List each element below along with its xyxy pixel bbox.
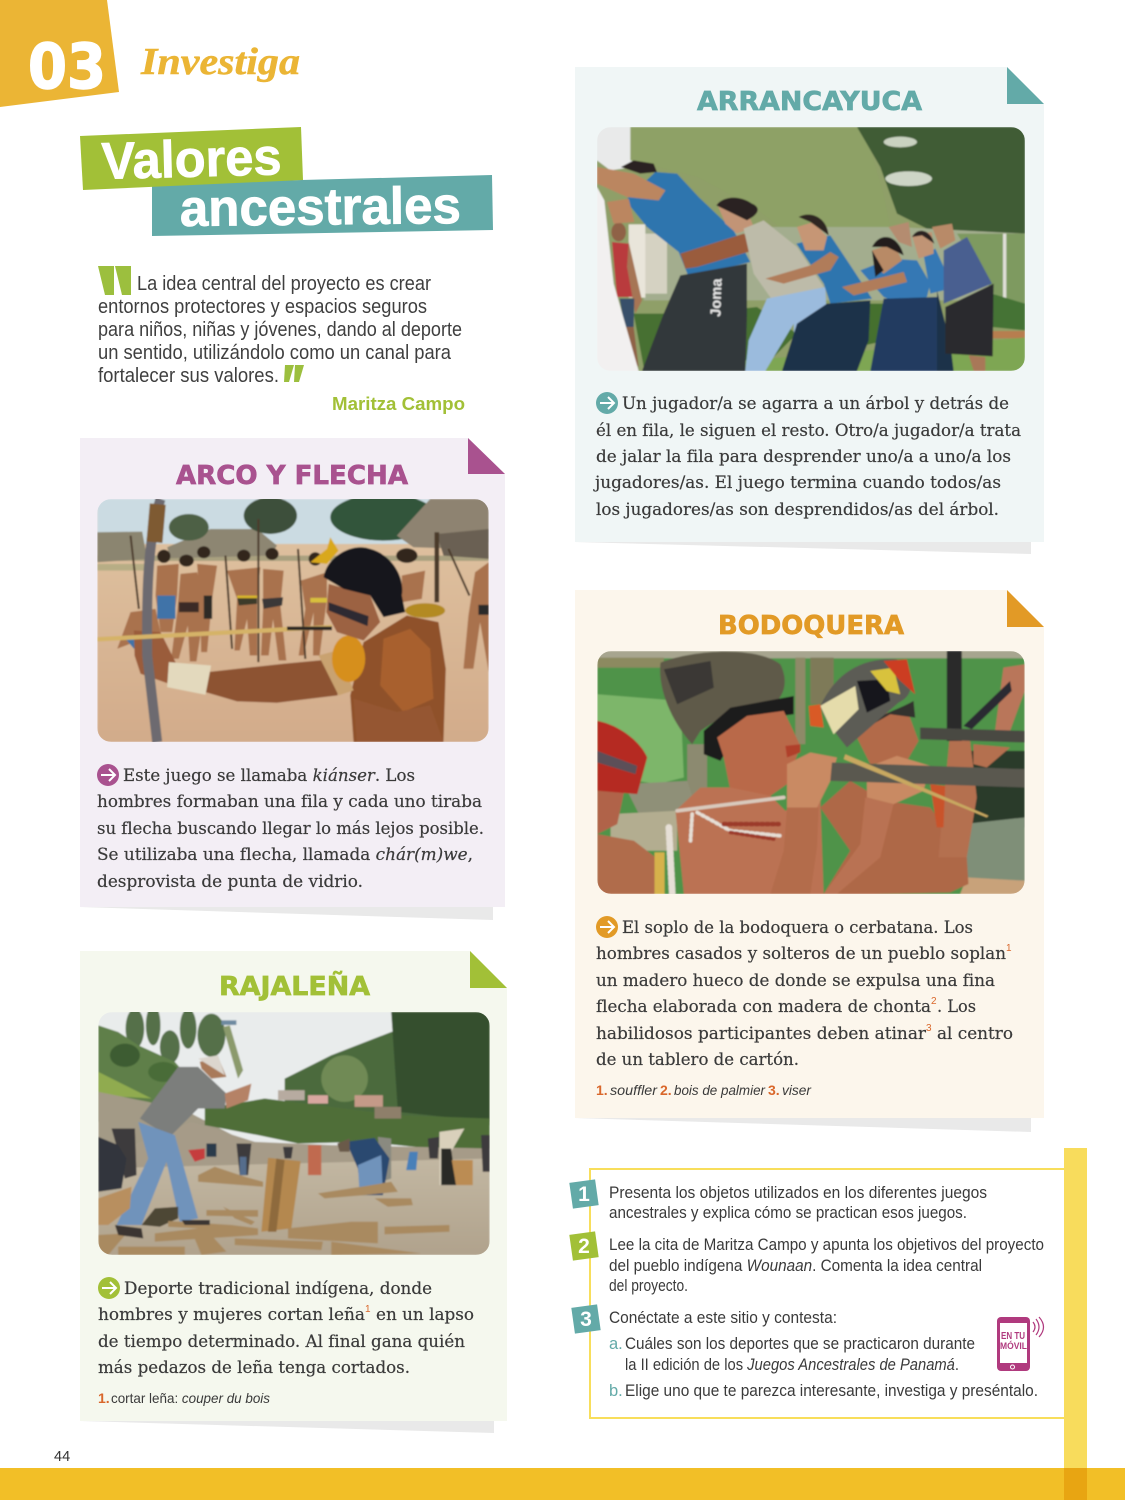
main man [717,711,800,796]
activity 2: del pueblo indígena Wounaan. Comenta la idea central [609,1257,982,1275]
chapter badge: 03 [28,30,106,103]
text block: más pedazos de leña tenga cortados. [98,1358,410,1377]
activity 3 [609,1309,1038,1400]
blowguns [947,651,962,741]
footnotes [596,1082,812,1098]
panel: activities [569,1169,1064,1418]
activity 3: b. [609,1382,623,1400]
panel: rajaleña [80,951,507,1433]
activity 3: Cuáles son los deportes que se practicaron durante [625,1335,975,1353]
footnotes: souffler [610,1082,658,1098]
footnotes: bois de palmier [674,1082,766,1098]
poles [131,519,469,662]
text block: un madero hueco de donde se expulsa una fina [596,971,995,990]
badge 3 [571,1304,601,1334]
text block: Este juego se llamaba kiánser. Los [123,766,415,785]
text block: hombres casados y solteros de un pueblo soplan [596,944,1006,963]
footnotes: 3. [768,1082,780,1098]
icon: arrow bullet [97,764,119,786]
arrow [97,625,332,641]
second man [855,709,919,764]
text block: Un jugador/a se agarra a un árbol y detrás de [622,394,1009,413]
badge 1: 1 [578,1183,590,1206]
heading: RAJALEÑA [219,970,370,1002]
activity 1 [609,1184,987,1222]
panel: arrancayuca [575,67,1044,554]
side band [1064,1148,1087,1500]
activity 1: ancestrales y explica cómo se practican esos juegos. [609,1204,967,1222]
archer body [350,616,446,742]
text block: 1 [365,1304,371,1315]
icon: arrow bullet [596,916,618,938]
photo: blowgun [597,651,1025,894]
section label: Investiga [140,41,300,83]
quote author: Maritza Campo [332,394,465,414]
badge 3: 3 [580,1308,592,1331]
text block: . Los [937,997,976,1016]
title: Valores [101,128,282,191]
man [625,172,750,277]
activity 3: Conéctate a este sitio y contesta: [609,1309,837,1327]
head [326,584,380,640]
trunk [597,187,639,371]
badge 2 [569,1231,599,1261]
text block: al centro [937,1024,1013,1043]
text block: 1 [1006,943,1012,954]
footnote: cortar leña: couper du bois [111,1390,270,1406]
icon: closing quote [284,365,304,382]
text block: jugadores/as. El juego termina cuando todos/as [593,473,1001,492]
footnotes: viser [782,1082,812,1098]
heading: BODOQUERA [718,611,904,641]
text block: desprovista de punta de vidrio. [97,872,363,891]
main man [140,1067,226,1137]
activity 2 [609,1236,1044,1295]
text block: de tiempo determinado. Al final gana quién [98,1332,465,1351]
photo: tug line: Joma [708,277,726,317]
text block [593,394,1021,519]
quote: un sentido, utilizándolo como un canal para [98,342,452,364]
left person [597,791,624,834]
text block: su flecha buscando llegar lo más lejos posible. [97,819,484,838]
text block: los jugadores/as son desprendidos/as del árbol. [596,500,999,519]
quote: para niños, niñas y jóvenes, dando al deporte [98,319,462,341]
page number: 44 [54,1449,70,1465]
activity 2: del proyecto. [609,1277,688,1295]
arm [205,659,338,703]
activity 1: Presenta los objetos utilizados en los diferentes juegos [609,1184,987,1202]
text block: 3 [926,1023,932,1034]
icon: opening quote [98,266,131,295]
footnotes: 2. [660,1082,672,1098]
photo: wood chopping [98,1012,490,1255]
text block [97,766,484,891]
text block: él en fila, le siguen el resto. Otro/a jugador/a trata [596,421,1021,440]
activity 2: Lee la cita de Maritza Campo y apunta los objetivos del proyecto [609,1236,1044,1254]
beads [669,797,784,892]
text block: en un lapso [376,1305,474,1324]
footnotes: 1. [596,1082,608,1098]
text block: habilidosos participantes deben atinar [596,1024,926,1043]
crowd [117,562,489,672]
background workers [112,1129,490,1178]
badge 1 [569,1179,599,1209]
text block: hombres y mujeres cortan leña [98,1305,365,1324]
title: ancestrales [180,177,461,238]
text block: flecha elaborada con madera de chonta [596,997,931,1016]
text block: Deporte tradicional indígena, donde [124,1279,432,1298]
footnote: 1. [98,1390,110,1406]
woman 3 [796,235,872,304]
text block: de jalar la fila para desprender uno/a a uno/a los [596,447,1011,466]
activity 3: a. [609,1335,623,1353]
text block: 2 [931,996,937,1007]
panel: bodoquera [575,590,1044,1132]
activity 3: Elige uno que te parezca interesante, investiga y preséntalo. [625,1382,1038,1400]
text block: El soplo de la bodoquera o cerbatana. Los [622,918,973,937]
quote [98,266,465,414]
text block [596,918,1013,1069]
title [80,127,493,238]
panel: arco y flecha [80,438,505,920]
icon: arrow bullet [98,1277,120,1299]
girl [611,223,626,241]
bow [147,499,161,742]
heading: ARCO Y FLECHA [176,461,408,491]
quote: entornos protectores y espacios seguros [98,296,427,318]
badge 2: 2 [578,1235,590,1258]
icon: phone [997,1317,1044,1371]
photo: tug line [597,127,1025,371]
wood [98,1187,132,1225]
activity 3: la II edición de los Juegos Ancestrales de Panamá. [625,1356,959,1374]
text block [98,1279,474,1377]
icon: phone: EN TU [1001,1331,1025,1342]
quote: fortalecer sus valores. [98,365,279,387]
icon: phone: MÓVIL [1000,1340,1027,1352]
text block: de un tablero de cartón. [596,1050,799,1069]
left trees [124,1012,226,1063]
photo: archer [97,499,489,742]
quote: La idea central del proyecto es crear [137,273,431,295]
headdress main [660,652,785,744]
text block: Se utilizaba una flecha, llamada chár(m)we, [97,845,473,864]
woman white [718,206,753,234]
heading: ARRANCAYUCA [697,87,922,117]
text block: hombres formaban una fila y cada uno tiraba [97,792,482,811]
icon: arrow bullet [596,392,618,414]
women group [860,259,930,304]
chapter badge [0,0,119,107]
bottom band [0,1468,1125,1500]
